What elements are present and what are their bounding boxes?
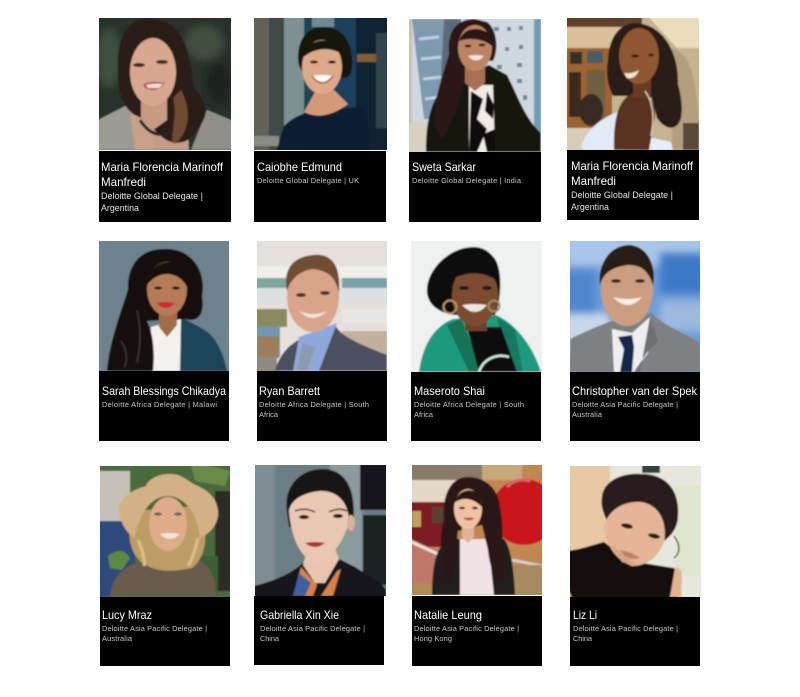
caption panel [100, 597, 230, 666]
photo: woman in white dress looking over shoulder [567, 18, 699, 150]
caption panel [570, 372, 700, 441]
caption panel [99, 371, 229, 441]
photo: woman in black blazer before a building [409, 19, 541, 152]
caption panel [411, 372, 541, 441]
country: Argentina [571, 202, 609, 212]
caption panel [254, 151, 386, 222]
card: Maria Florencia Marinoff Manfredi, Argentina (second) [562, 13, 704, 220]
photo: woman with long hair beside a red sphere [412, 465, 542, 595]
card: Christopher van der Spek, Australia [560, 236, 710, 441]
name: Lucy Mraz [102, 608, 152, 622]
card: Maseroto Shai, South Africa [406, 236, 547, 441]
name: Gabriella Xin Xie [260, 608, 339, 622]
caption panel [99, 151, 231, 222]
card: Caiobhe Edmund, UK [249, 13, 392, 222]
photo: woman with long black curls and teal blazer [99, 241, 229, 371]
role: Deloitte Global Delegate | [101, 191, 203, 201]
caption panel [570, 597, 700, 666]
name: Maseroto Shai [414, 384, 485, 398]
country: Africa [414, 410, 434, 419]
caption panel [567, 150, 699, 220]
name: Sweta Sarkar [412, 160, 476, 174]
photo: smiling man in navy suit with striped tie [257, 241, 387, 371]
caption panel [257, 371, 387, 441]
role and country: Deloitte Global Delegate | UK [257, 176, 359, 185]
name: Maria Florencia Marinoff [101, 160, 224, 174]
card: Sarah Blessings Chikadya, Malawi [94, 236, 234, 441]
country: Australia [102, 634, 133, 643]
country: Australia [572, 410, 603, 419]
photo: woman with tilted head in black sleeveless top [570, 466, 701, 597]
card: Ryan Barrett, South Africa [252, 236, 392, 441]
name: Caiobhe Edmund [257, 160, 342, 174]
role: Deloitte Global Delegate | [571, 190, 673, 200]
card: Natalie Leung, Hong Kong [407, 460, 557, 666]
name continued: Manfredi [101, 175, 146, 189]
country: China [260, 634, 280, 643]
role: Deloitte Africa Delegate | South [414, 400, 524, 409]
role: Deloitte Asia Pacific Delegate | [260, 624, 365, 633]
role and country: Deloitte Global Delegate | India [412, 176, 522, 185]
photo: smiling man in grey suit with navy tie [570, 241, 700, 372]
name: Christopher van der Spek [572, 384, 698, 398]
role: Deloitte Asia Pacific Delegate | [102, 624, 207, 633]
role: Deloitte Africa Delegate | South [259, 400, 369, 409]
card: Gabriella Xin Xie, China [250, 460, 391, 665]
country: Africa [259, 410, 279, 419]
caption panel [254, 596, 384, 665]
name: Natalie Leung [414, 608, 482, 622]
country: China [573, 634, 593, 643]
photo: woman in green blazer with hoop earrings [411, 241, 542, 372]
name: Liz Li [573, 608, 597, 622]
name: Ryan Barrett [259, 384, 321, 398]
caption panel [412, 596, 542, 666]
photo: woman with hair tied back in navy top [254, 18, 387, 150]
name: Sarah Blessings Chikadya [102, 384, 226, 398]
role: Deloitte Asia Pacific Delegate | [573, 624, 678, 633]
card: Maria Florencia Marinoff Manfredi, Argentina [94, 13, 236, 222]
card: Lucy Mraz, Australia [95, 461, 235, 666]
caption panel [409, 152, 541, 222]
photo: woman in wide straw hat [100, 466, 230, 597]
role and country: Deloitte Africa Delegate | Malawi [102, 400, 217, 409]
role: Deloitte Asia Pacific Delegate | [414, 624, 519, 633]
card: Liz Li, China [565, 461, 706, 666]
name continued: Manfredi [571, 174, 616, 188]
country: Hong Kong [414, 634, 452, 643]
card: Sweta Sarkar, India [404, 14, 546, 222]
country: Argentina [101, 203, 139, 213]
name: Maria Florencia Marinoff [571, 159, 694, 173]
photo: woman with tied-back hair in black jacket [255, 465, 386, 596]
role: Deloitte Asia Pacific Delegate | [572, 400, 678, 409]
photo: woman with long brown hair and grey blazer [99, 18, 231, 150]
